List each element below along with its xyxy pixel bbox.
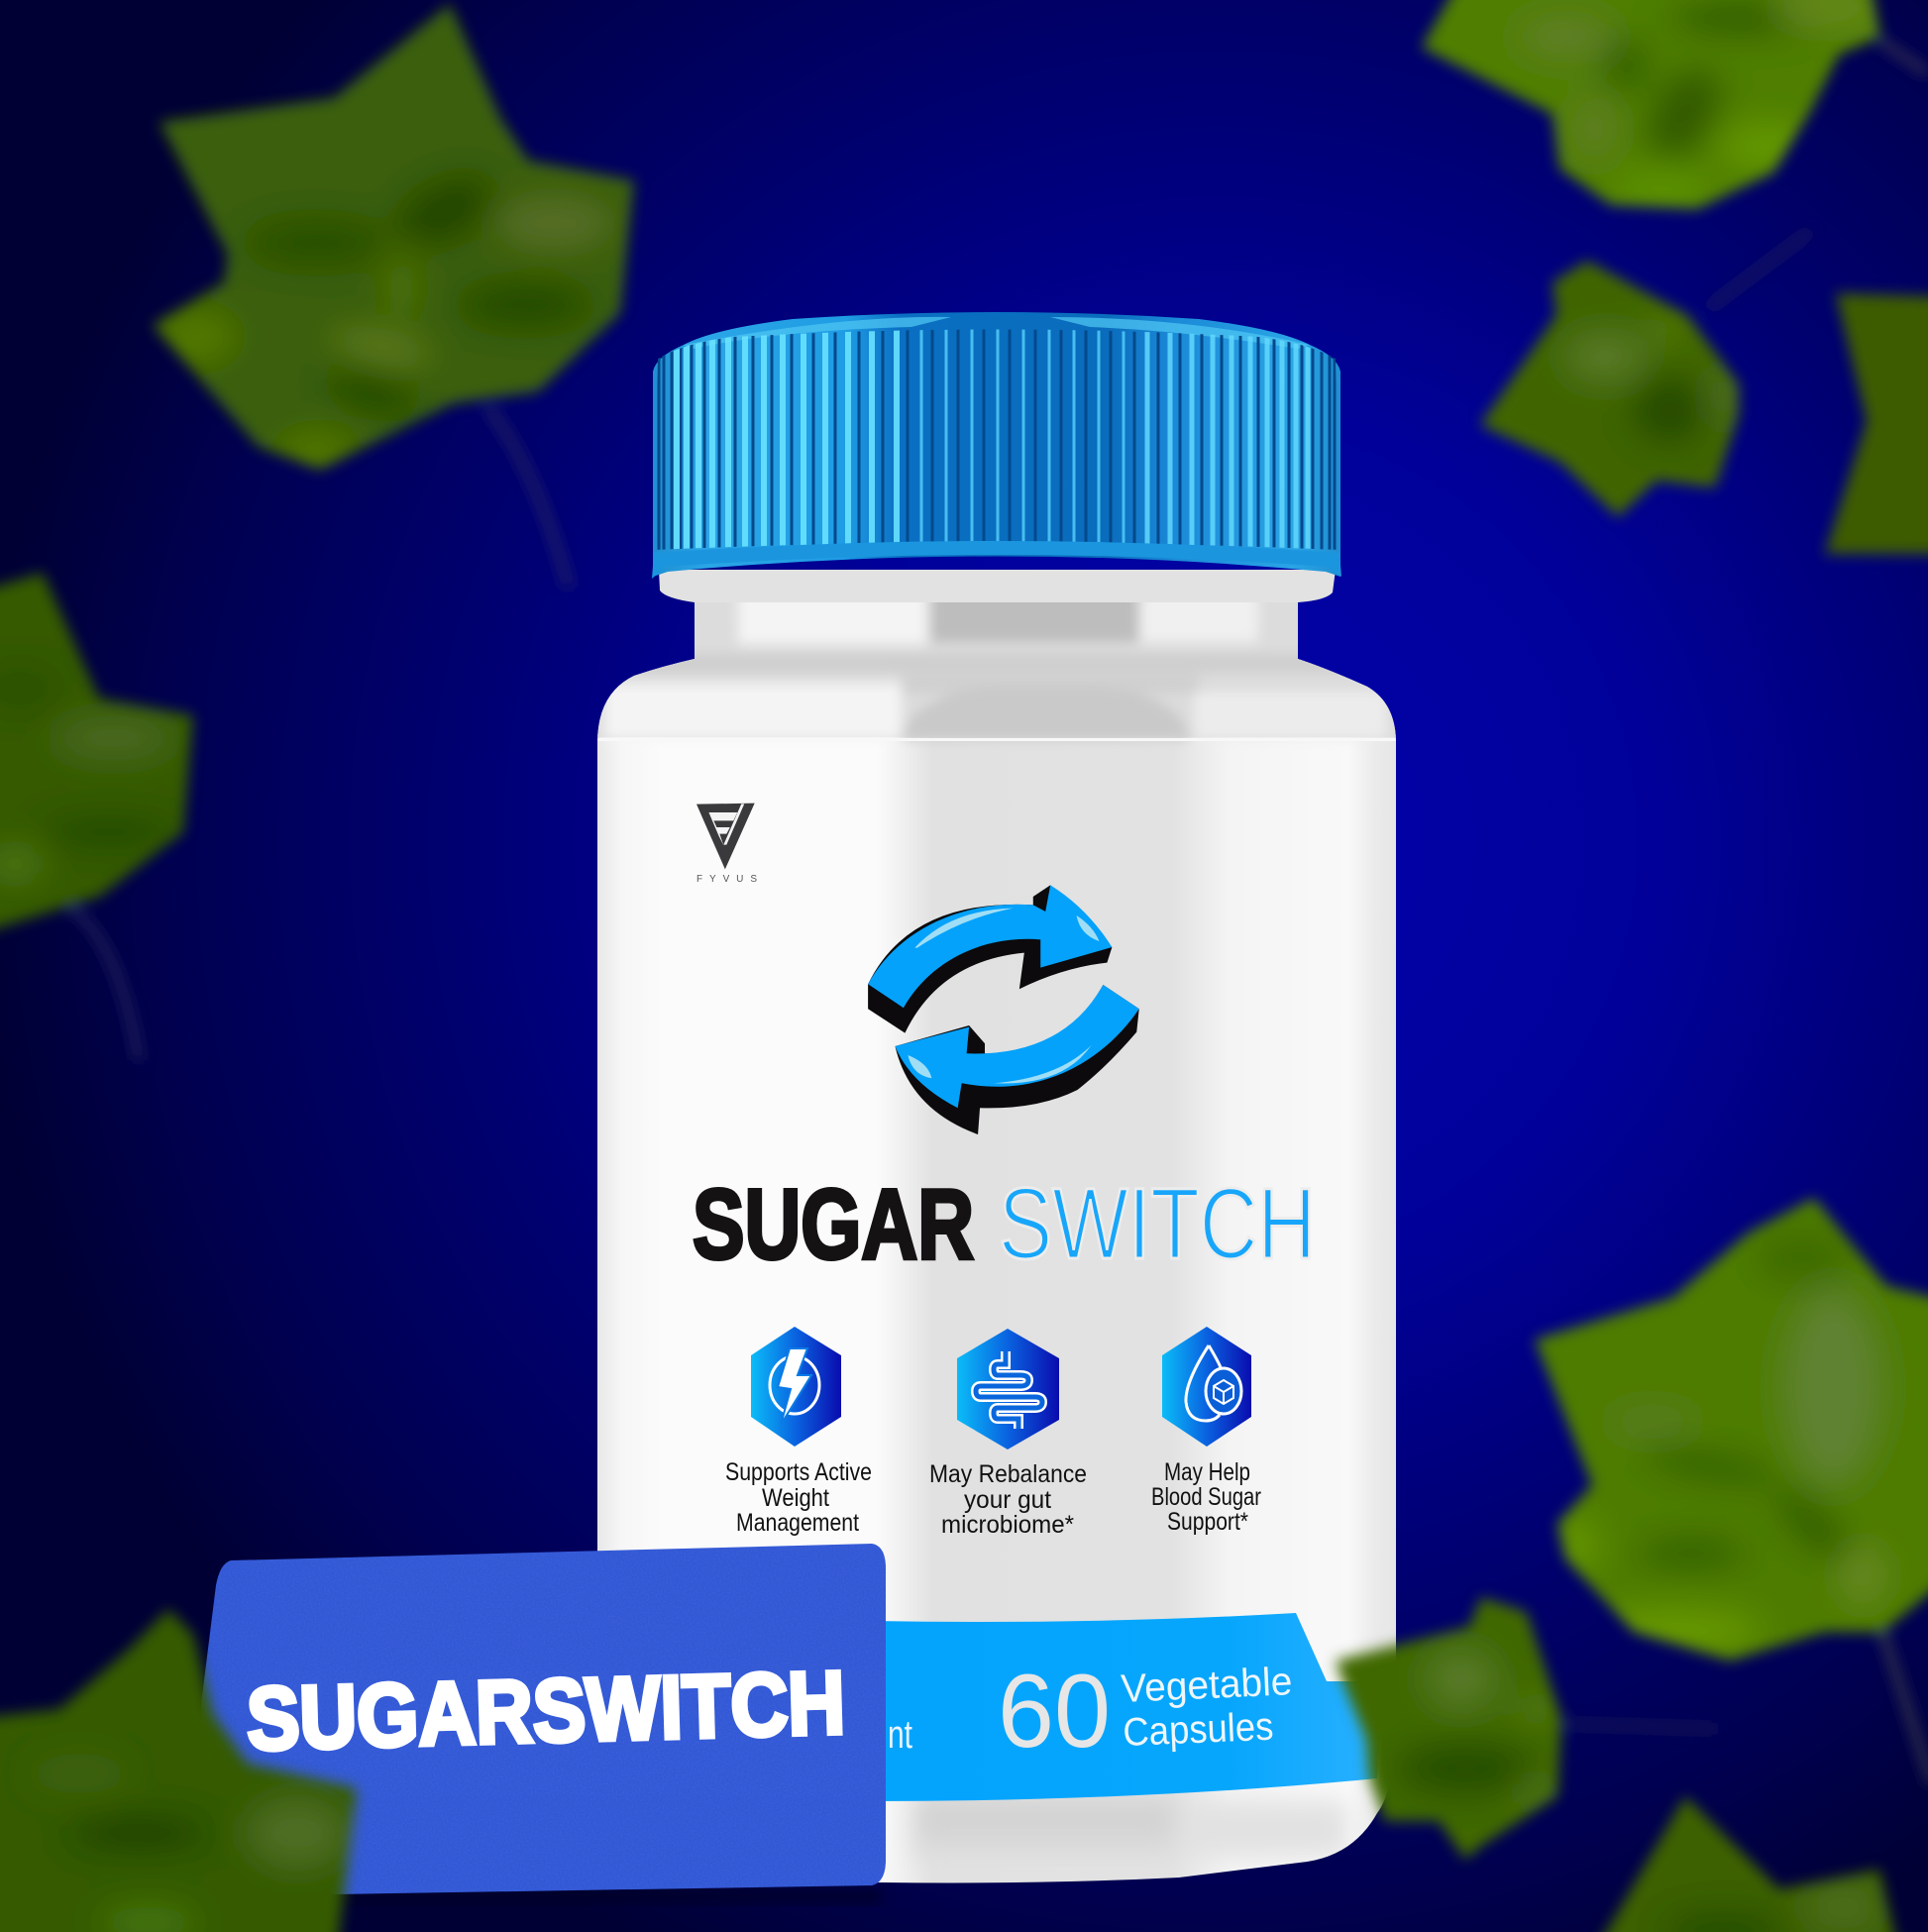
icon: intestine hexagon: [957, 1329, 1059, 1449]
label: May Rebalance your gut microbiome: microbiome*: [941, 1511, 1074, 1539]
bottom arrow: highlights: [908, 1045, 1091, 1084]
card shadow: [297, 1888, 882, 1904]
text: SUGAR: SUGAR: [693, 1169, 974, 1280]
leaf: lower right large: [1526, 1189, 1928, 1783]
leaf: bottom right: [1596, 1791, 1903, 1932]
label: Supports Active Weight Management: Management: [736, 1509, 859, 1537]
text: SWITCH: SWITCH: [999, 1167, 1316, 1280]
cap: ribs: [658, 329, 1336, 550]
leaf: bottom left: [0, 1605, 367, 1932]
label: May Help Blood Sugar Support: Blood Sugar: [1151, 1483, 1261, 1511]
text: nt: nt: [888, 1713, 912, 1757]
top arrow: black extrusion: [868, 885, 1112, 1033]
bottle: [597, 570, 1396, 1882]
label: May Help Blood Sugar Support: Support*: [1167, 1508, 1248, 1536]
bottle: collar and neck: [659, 570, 1336, 662]
label: Supports Active Weight Management: Weight: [762, 1484, 829, 1512]
label: Supports Active Weight Management: [725, 1458, 872, 1537]
icon: drop and cube hexagon: [1162, 1327, 1251, 1447]
card: brand text: SUGARSWITCH: [246, 1654, 846, 1770]
bottom arrow: blue face: [895, 985, 1139, 1108]
top arrow: blue face: [868, 885, 1112, 1008]
label: Supports Active Weight Management: Supports Active: [725, 1458, 872, 1486]
leaf: right middle: [1466, 231, 1811, 525]
cap: base shape: [653, 312, 1340, 577]
card: paper: [193, 1536, 892, 1902]
leaves in front of the bottle and card: [0, 1585, 1718, 1932]
leaf: left middle: [0, 565, 208, 1060]
bottle cap: [652, 312, 1341, 579]
label: May Help Blood Sugar Support: May Help: [1164, 1458, 1250, 1486]
leaf: top right: [1407, 0, 1928, 218]
text: FYVUS: FYVUS: [696, 874, 757, 885]
label: May Rebalance your gut microbiome: your gut: [964, 1486, 1051, 1514]
text: 60: 60: [998, 1654, 1111, 1770]
icon: Fyvus triangle: [696, 804, 755, 869]
benefit: blood sugar: [1151, 1327, 1261, 1536]
top arrow: highlights: [914, 909, 1099, 948]
text: Vegetable: Vegetable: [1120, 1660, 1293, 1711]
benefit: gut microbiome: [929, 1329, 1087, 1539]
cap: lower lip: [652, 541, 1341, 579]
logo: Fyvus: [696, 804, 757, 885]
label band: 60 vegetable capsules: [872, 1613, 1383, 1801]
icon: lightning hexagon: [751, 1327, 841, 1447]
product name: [693, 1167, 1316, 1280]
blue card: SUGARSWITCH: [193, 1536, 892, 1902]
label: May Rebalance your gut microbiome: May Rebalance: [929, 1460, 1087, 1488]
bottle: neck and shoulder shading: [597, 585, 1396, 1863]
leaf: far right: [1825, 293, 1928, 554]
text: Capsules: Capsules: [1123, 1705, 1274, 1755]
bottom arrow: black extrusion: [895, 985, 1139, 1134]
benefit: weight management: [725, 1327, 872, 1537]
label: May Help Blood Sugar Support: [1151, 1458, 1261, 1536]
leaf: top left: [129, 0, 654, 588]
band: blue strip: [872, 1613, 1383, 1801]
icon: recycle arrows: [868, 885, 1139, 1134]
label: May Rebalance your gut microbiome: [929, 1460, 1087, 1539]
leaf: lower right small: [1328, 1585, 1718, 1873]
bottle: body silhouette: [597, 659, 1396, 1882]
cap: top rim highlight: [684, 317, 1310, 349]
